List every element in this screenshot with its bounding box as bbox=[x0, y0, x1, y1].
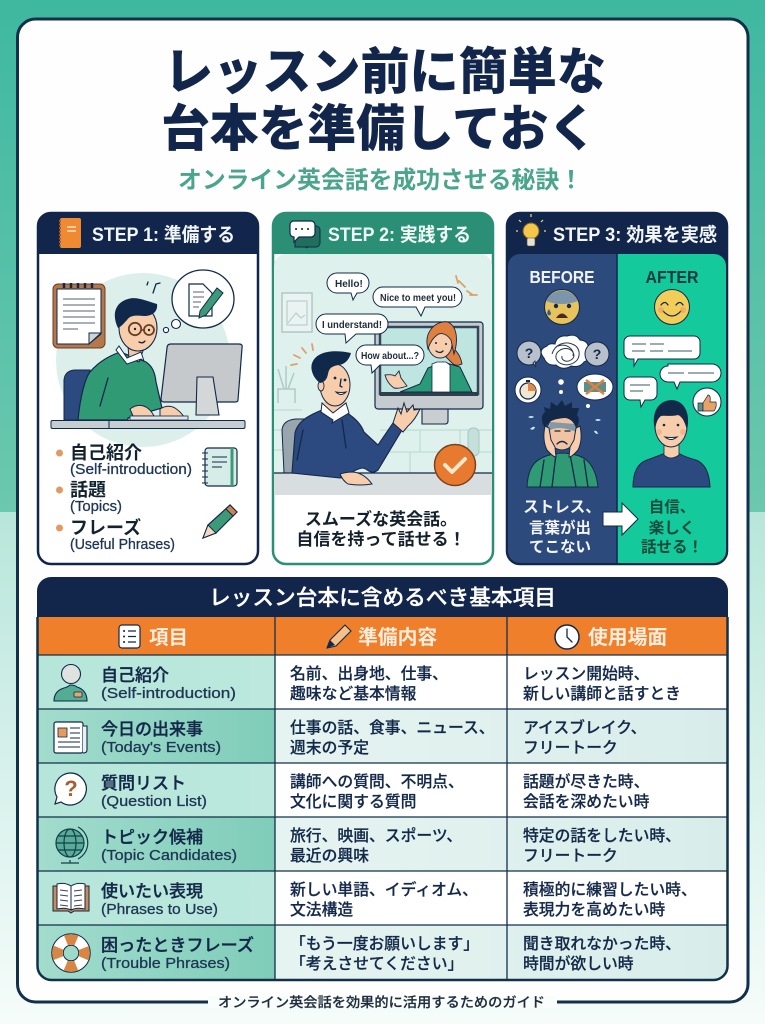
table header row bbox=[37, 617, 728, 655]
title: レッスン前に簡単な bbox=[164, 44, 606, 100]
speech bubbles bbox=[624, 336, 721, 416]
row: trouble phrases: 聞き取れなかった時、 bbox=[523, 935, 681, 953]
worry bubbles: ? bbox=[525, 345, 533, 361]
panel: step 3 bbox=[507, 213, 727, 564]
icon: newspaper bbox=[54, 722, 87, 753]
row: self-introduction: 新しい講師と話すとき bbox=[523, 684, 681, 703]
accent marks bbox=[456, 276, 477, 295]
header: item: 項目 bbox=[149, 627, 188, 649]
table grid bbox=[37, 617, 728, 980]
speech bubbles: Nice to meet you! bbox=[380, 293, 456, 304]
row: today's events: 仕事の話、食事、ニュース、 bbox=[290, 719, 495, 737]
row: today's events: フリートーク bbox=[523, 739, 618, 757]
step 2 caption: 自信を持って話せる！ bbox=[296, 529, 466, 549]
monitor with teacher bbox=[375, 322, 483, 424]
step 2 caption bbox=[296, 509, 466, 549]
row: question list: 会話を深めたい時 bbox=[523, 793, 650, 811]
row: phrases to use bbox=[53, 880, 697, 919]
step 1 header: STEP 1: 準備する bbox=[92, 224, 235, 246]
footer caption: オンライン英会話を効果的に活用するためのガイド bbox=[218, 994, 545, 1010]
row: trouble phrases bbox=[58, 935, 681, 973]
row: self-introduction: 趣味など基本情報 bbox=[290, 685, 417, 703]
before caption bbox=[524, 500, 591, 554]
header: preparation: 準備内容 bbox=[358, 627, 437, 649]
step 1 list: (Useful Phrases) bbox=[70, 536, 175, 553]
step 1 list: 話題 bbox=[70, 480, 106, 500]
stressed person bbox=[527, 400, 601, 487]
row: question list: 話題が尽きた時、 bbox=[523, 772, 649, 791]
table: lesson script items bbox=[37, 577, 728, 981]
desk bbox=[274, 473, 492, 495]
after column bbox=[617, 254, 726, 563]
row: trouble phrases: (Trouble Phrases) bbox=[101, 955, 230, 972]
speech bubbles bbox=[316, 273, 462, 373]
row: phrases to use: 文法構造 bbox=[290, 901, 353, 919]
before caption: 言葉が出 bbox=[529, 518, 591, 537]
row: self-introduction: レッスン開始時、 bbox=[523, 665, 649, 683]
row: today's events: 週末の予定 bbox=[290, 739, 369, 757]
illustration: person preparing at computer bbox=[51, 270, 245, 447]
step 2 caption: スムーズな英会話。 bbox=[305, 509, 457, 529]
row: trouble phrases: 困ったときフレーズ bbox=[101, 935, 254, 955]
step 2 header bbox=[272, 212, 494, 254]
icon: globe bbox=[56, 827, 88, 863]
chair bbox=[64, 370, 90, 420]
row: today's events bbox=[54, 718, 646, 757]
step 1 header bbox=[37, 212, 259, 254]
room details bbox=[274, 293, 492, 473]
title bbox=[161, 44, 606, 157]
after caption: 自信、 bbox=[649, 498, 695, 516]
row: trouble phrases: 「考えさせてください」 bbox=[290, 955, 463, 973]
row: today's events: アイスブレイク、 bbox=[523, 718, 646, 737]
teacher bbox=[385, 322, 472, 392]
row: self-introduction bbox=[54, 664, 681, 703]
row: today's events: 今日の出来事 bbox=[101, 720, 203, 739]
after caption: 話せる！ bbox=[641, 538, 703, 556]
row: topic candidates bbox=[56, 827, 681, 865]
table rows background bbox=[37, 655, 728, 981]
man speaking bbox=[292, 351, 420, 485]
person bbox=[78, 298, 184, 420]
icon: anxious face bbox=[544, 290, 580, 324]
step 1 list: (Self-introduction) bbox=[70, 461, 192, 478]
after caption: 楽しく bbox=[649, 518, 695, 537]
row: question list: 講師への質問、不明点、 bbox=[290, 772, 464, 791]
speech bubbles: Hello! bbox=[335, 279, 363, 290]
row: phrases to use: 積極的に練習したい時、 bbox=[523, 881, 697, 899]
row: question list bbox=[55, 772, 650, 811]
step 3 header bbox=[516, 214, 717, 246]
row: self-introduction: 自己紹介 bbox=[101, 666, 169, 685]
row: topic candidates: (Topic Candidates) bbox=[101, 847, 237, 864]
icon: question bubble bbox=[55, 773, 86, 805]
title: 台本を準備しておく bbox=[161, 101, 597, 157]
before caption: てこない bbox=[529, 538, 591, 556]
subtitle: オンライン英会話を成功させる秘訣！ bbox=[178, 167, 583, 194]
before caption: ストレス、 bbox=[523, 499, 601, 516]
icon: question bubble: ? bbox=[64, 776, 78, 801]
step 1 list: (Topics) bbox=[70, 498, 122, 515]
step 1 list: 自己紹介 bbox=[70, 443, 142, 463]
illustration: online conversation bbox=[274, 254, 492, 495]
before column: BEFORE bbox=[530, 267, 594, 287]
row: question list: 文化に関する質問 bbox=[290, 793, 416, 811]
arrow: before to after bbox=[603, 503, 638, 535]
step 1 list: フレーズ bbox=[70, 517, 141, 538]
before column bbox=[508, 254, 617, 563]
row: trouble phrases: 「もう一度お願いします」 bbox=[290, 935, 479, 953]
after column: AFTER bbox=[646, 267, 699, 287]
speech bubbles: How about...? bbox=[361, 351, 419, 362]
row: topic candidates: 特定の話をしたい時、 bbox=[523, 827, 681, 845]
header: usage scene bbox=[555, 625, 667, 649]
row: self-introduction: 名前、出身地、仕事、 bbox=[290, 665, 448, 683]
after caption bbox=[641, 498, 697, 554]
row: question list: 質問リスト bbox=[101, 774, 186, 793]
panel: step 1 bbox=[37, 212, 259, 564]
desk bbox=[51, 416, 245, 428]
monitor bbox=[161, 344, 242, 415]
worry bubbles: ? bbox=[593, 346, 601, 362]
table title bar: レッスン台本に含めるべき基本項目 bbox=[209, 586, 556, 610]
step 2 header: STEP 2: 実践する bbox=[328, 224, 471, 246]
row: phrases to use: 使いたい表現 bbox=[101, 882, 203, 901]
row: topic candidates: 旅行、映画、スポーツ、 bbox=[290, 827, 462, 845]
confident person bbox=[633, 400, 710, 487]
worry bubbles bbox=[515, 335, 613, 408]
header: preparation bbox=[327, 625, 437, 649]
icon: life ring bbox=[58, 940, 84, 966]
row: topic candidates: トピック候補 bbox=[101, 828, 203, 847]
row: phrases to use: 表現力を高めたい時 bbox=[523, 901, 665, 919]
icon: person bbox=[54, 664, 87, 701]
thought bubble bbox=[147, 270, 234, 333]
header: item bbox=[119, 625, 188, 649]
clipboard bbox=[53, 283, 105, 348]
row: topic candidates: 最近の興味 bbox=[290, 847, 369, 865]
icon: notebook bbox=[202, 448, 237, 486]
row: question list: (Question List) bbox=[101, 793, 207, 810]
speech bubbles: I understand! bbox=[322, 320, 382, 331]
table title bar bbox=[37, 577, 728, 617]
icon: pencil bbox=[203, 505, 237, 538]
icon: open book bbox=[53, 883, 89, 913]
icon: smiling face bbox=[654, 290, 690, 324]
row: phrases to use: (Phrases to Use) bbox=[101, 901, 218, 918]
icon: orange check badge bbox=[434, 444, 476, 486]
chair bbox=[282, 419, 304, 473]
header: usage scene: 使用場面 bbox=[588, 627, 667, 649]
step 1 list bbox=[56, 443, 192, 553]
step 3 header: STEP 3: 効果を実感 bbox=[553, 223, 717, 246]
row: phrases to use: 新しい単語、イディオム、 bbox=[290, 880, 478, 899]
row: trouble phrases: 時間が欲しい時 bbox=[523, 954, 634, 973]
row: today's events: (Today's Events) bbox=[101, 739, 221, 756]
row: topic candidates: フリートーク bbox=[523, 847, 618, 865]
panel: step 2 bbox=[272, 212, 494, 564]
row: self-introduction: (Self-introduction) bbox=[101, 685, 236, 702]
